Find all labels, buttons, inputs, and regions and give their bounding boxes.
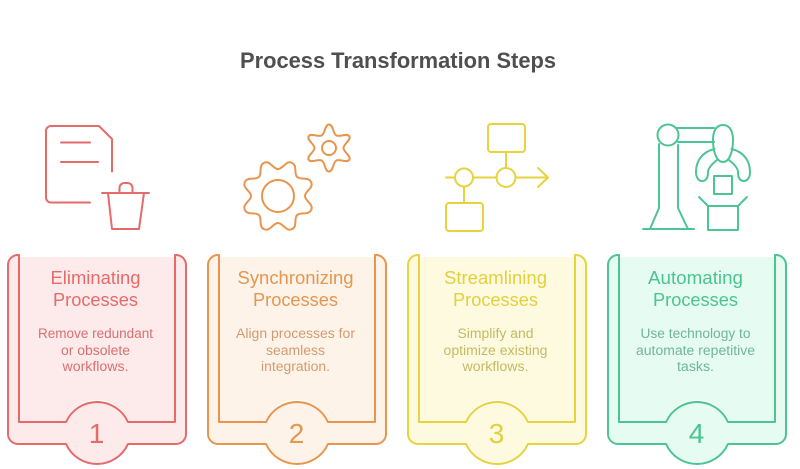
panel shape 4 [608,255,786,464]
panel shape 2 [208,255,386,464]
panel: step 1 eliminating processes [8,255,186,464]
number 1: 1 [89,418,104,449]
heading 3: Streamlining [444,268,547,288]
description 2: Align processes for [236,326,356,341]
icon: document and trash [46,126,149,229]
description 1 [38,326,153,374]
panel interior 3 [420,257,574,421]
heading 4 second line: Processes [653,290,738,310]
description 4: Use technology to [640,326,750,341]
description 3: workflows. [461,359,529,374]
description 2: seamless [266,343,325,358]
panel interior 2 [220,257,374,421]
heading 4: Automating [648,268,743,288]
title: Process Transformation Steps [240,48,556,73]
description 3: Simplify and [458,326,534,341]
panel interior 4 [620,257,774,421]
description 4: tasks. [677,359,714,374]
icon: robot arm and box [643,124,750,230]
panel: step 2 synchronizing processes [208,255,386,464]
number 2: 2 [289,418,304,449]
description 1: Remove redundant [38,326,153,341]
description 1: or obsolete [61,343,130,358]
panel: step 4 automating processes [608,255,786,464]
icon: gears [241,124,353,233]
description 2 [236,326,356,374]
number 4: 4 [689,418,704,449]
description 3 [444,326,548,374]
description 2: integration. [261,359,330,374]
icon: process flow with arrow [446,124,548,231]
panel interior 1 [20,257,174,421]
panel shape 1 [8,255,186,464]
description 4: automate repetitive [636,343,755,358]
description 4 [636,326,755,374]
heading 3 second line: Processes [453,290,538,310]
heading 1 second line: Processes [53,290,138,310]
heading 2: Synchronizing [238,268,354,288]
description 3: optimize existing [444,343,548,358]
panel shape 3 [408,255,586,464]
number 3: 3 [489,418,504,449]
description 1: workflows. [61,359,129,374]
panel: step 3 streamlining processes [408,255,586,464]
heading 2 second line: Processes [253,290,338,310]
heading 1: Eliminating [50,268,140,288]
